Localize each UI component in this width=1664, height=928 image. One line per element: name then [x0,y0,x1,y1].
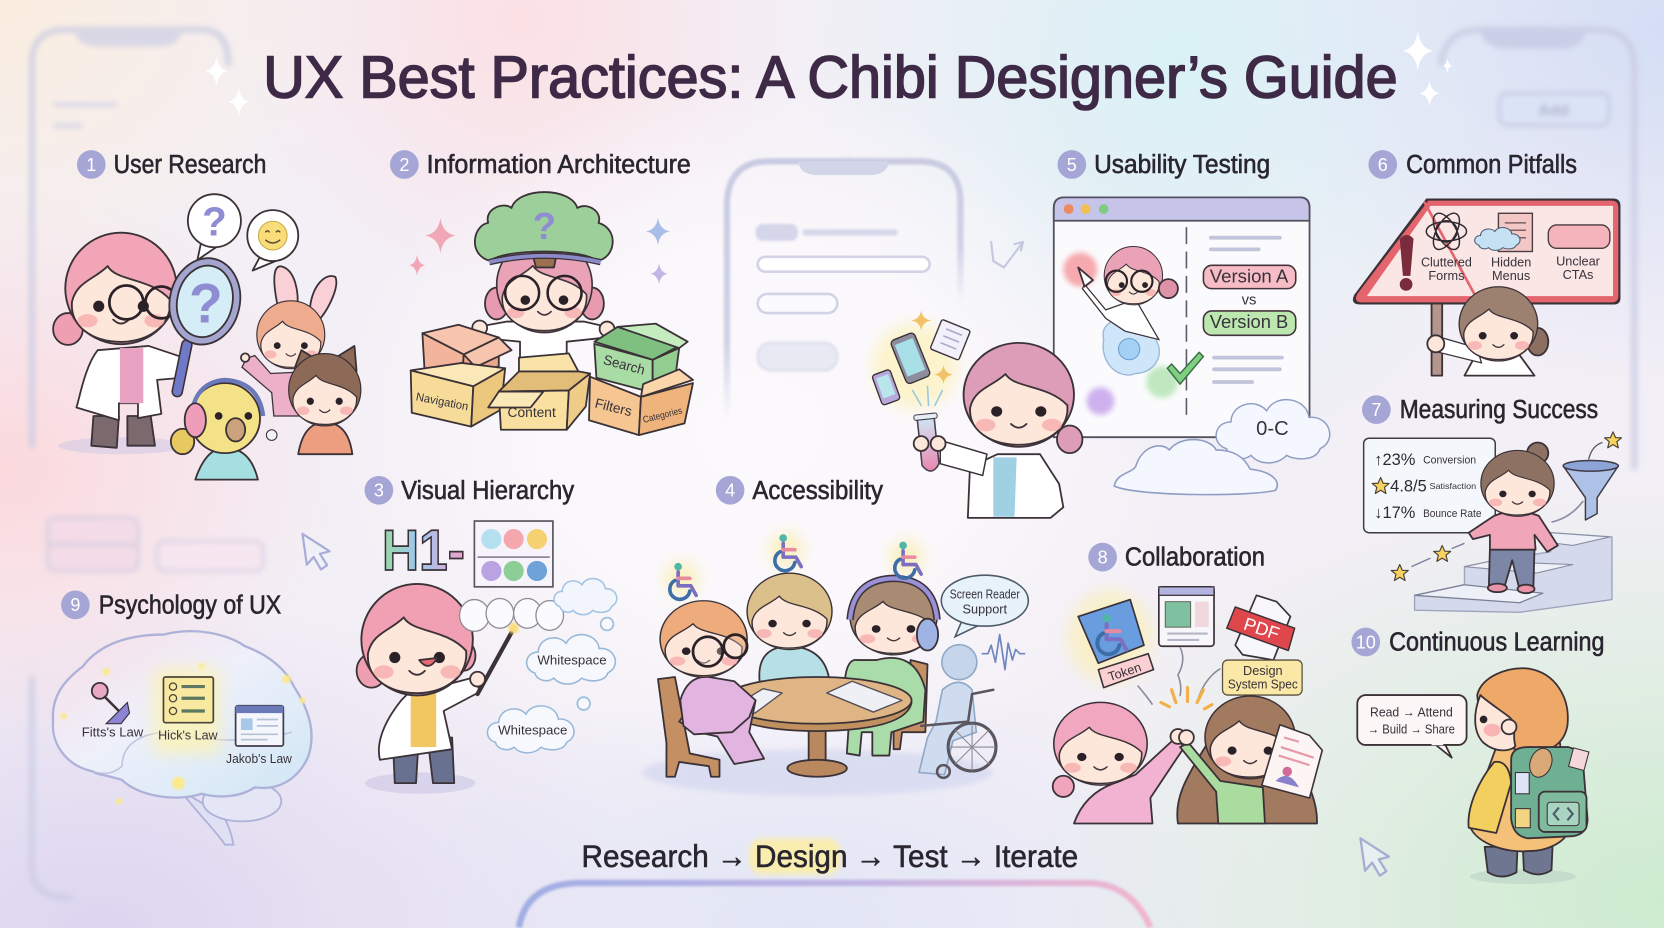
keyboards [732,681,902,713]
metrics card: 4.8/5 [1390,477,1427,495]
box: search: Search [602,352,647,378]
label: hidden menus: Menus [1492,268,1530,283]
small thought dots [577,618,613,710]
signpost [1432,297,1442,376]
heatmap glows [1063,253,1178,415]
icon: cluttered forms scribble [1426,209,1467,254]
shadow [365,773,475,794]
box: navigation [411,363,505,427]
colour palette card [474,521,553,587]
panel: 2 information architecture [390,150,693,435]
box: filters and categories: Categories [642,405,684,426]
panel: 4 accessibility [642,476,1028,796]
round table [723,677,912,777]
person: blue [747,573,832,683]
chairs [658,660,928,777]
panel: 9 psychology of UX [53,591,312,845]
pointer stick [470,623,519,694]
panel: 3 visual hierarchy [357,476,617,794]
scientist character with test tube [872,324,1082,518]
label: Hick's Law: Hick's Law [158,728,218,743]
glow behind Design [749,838,840,874]
heading: user research: 1 [86,155,96,175]
sketch bubbles [460,599,564,631]
clouds [1114,400,1330,495]
brain sparkles [61,663,306,804]
person: glasses, purple [660,601,764,764]
icon: Fitts's Law [92,683,130,724]
metrics card: ↑23% [1374,451,1416,469]
icon: wheelchair symbols [670,534,921,599]
blue splotch [1103,318,1159,375]
cursor: left [302,530,332,571]
heading: accessibility: 4 [725,481,735,501]
label: Jakob's Law: Jakob's Law [226,751,293,766]
small tester character [1078,247,1178,340]
clouds: 0-C [1256,418,1289,440]
PDF document: PDF [1241,614,1282,644]
head with glasses [497,237,592,333]
bunny child [241,266,336,416]
icon: wheelchair glows [664,533,923,595]
box: unlabeled orange [422,325,512,382]
resume document [1262,725,1322,798]
background: faded phone frame top left [32,30,228,446]
heading: user research: User Research [114,151,266,179]
wheelchair user silhouette [919,645,996,778]
heading: visual hierarchy: 3 [374,481,384,501]
teacher character [357,584,480,783]
cat-eared child [289,346,361,454]
heading: usability testing: Usability Testing [1094,151,1270,179]
heading: common pitfalls: 6 [1378,155,1388,175]
background: faded cards left [48,518,263,571]
version A pill: Version A [1210,266,1288,286]
panel: 7 measuring success [1362,395,1622,612]
panel: 1 user research [53,150,361,480]
idea tree [475,192,613,267]
label: hidden menus: Hidden [1491,254,1531,269]
background: faded phone frame top right: Add [1538,103,1569,120]
version B pill [1203,311,1296,335]
shadow [58,437,186,454]
heading: information architecture: Information Architecture [427,151,691,179]
mini browser card [1159,587,1214,646]
label: unclear CTAs: CTAs [1563,267,1593,282]
character holding sign [1427,287,1548,376]
design system spec note: System Spec [1228,677,1298,692]
box: search [594,324,688,393]
funnel [1551,443,1618,522]
body and pigtails [472,288,614,382]
box: navigation: Navigation [415,390,469,413]
metrics card [1364,438,1495,533]
icon: hidden menus [1475,213,1532,251]
cloud: whitespace lower: Whitespace [498,722,567,737]
sparkles left of title [205,56,249,117]
label: unclear CTAs: Unclear [1556,253,1601,268]
cloud: whitespace lower [487,706,574,753]
heading: continuous learning: 10 [1356,632,1376,652]
sparkles right of title [1402,31,1452,107]
check mark [1167,352,1203,384]
icon: Hick's Law menu [163,677,213,723]
design system spec note: Design [1243,663,1283,678]
researcher character [53,233,183,448]
connector squiggles [1138,647,1220,705]
magnifying glass [162,252,248,392]
box: filters and categories: Filters [593,396,634,419]
version B pill: Version B [1210,312,1288,332]
metrics card: Conversion [1423,455,1476,467]
character: brown hair [1177,696,1317,823]
token label [1098,654,1154,688]
metrics card: Satisfaction [1429,482,1476,491]
background: faded phone frame bottom left [32,679,70,898]
learner character [1468,668,1568,877]
token label: Token [1106,659,1143,684]
speech bubble: question [188,194,241,260]
idea tree: ? [533,205,556,248]
label: cluttered forms: Cluttered [1421,254,1472,269]
heading: information architecture: 2 [399,155,409,175]
cursor: bottom right [1360,835,1391,878]
speech bubble: learning path: → Build → Share [1368,721,1455,736]
metrics card: ↓17% [1374,504,1416,522]
icon: Jakob's Law browser [236,706,283,746]
speech bubble: learning path: Read → Attend [1370,704,1453,719]
token card glow [1068,590,1152,683]
heading: psychology of UX: 9 [70,595,80,615]
floor shadow [642,749,992,796]
heading: usability testing: 5 [1067,155,1077,175]
warning sign [1353,198,1620,305]
heading: measuring success: Measuring Success [1400,396,1598,424]
box: filters and categories [589,369,693,435]
H1 sample: H1- [382,519,465,583]
text lines [1211,238,1282,382]
character: pink hair [1053,702,1185,823]
icon: unclear CTA button [1548,225,1610,248]
brain illustration [53,631,312,845]
backpack [1511,745,1589,838]
label: cluttered forms: Forms [1428,268,1464,283]
panel: 8 collaboration [1053,543,1322,823]
blue cloud [554,579,617,615]
box: content: Content [508,405,556,420]
box: content [488,353,590,430]
panel: 10 continuous learning [1351,628,1605,884]
label: cluttered forms [1421,254,1472,283]
speech bubble: learning path [1357,695,1467,758]
character on stairs [1469,443,1558,593]
token card [1078,600,1144,663]
high-five sparks [1161,688,1212,709]
callout: screen reader support: Support [963,601,1008,616]
puppy child with headphones [171,380,277,480]
shadow [1470,869,1576,884]
PDF document [1227,595,1295,660]
heading: psychology of UX: Psychology of UX [99,591,281,619]
stars [1391,432,1622,580]
panel: 5 usability testing [872,150,1330,518]
heading: accessibility: Accessibility [752,477,883,505]
speech bubble: question: ? [202,199,227,245]
floating devices [872,310,971,406]
metrics card: Bounce Rate [1423,508,1481,520]
title: UX Best Practices: A Chibi Designer’s Guide [263,44,1398,111]
stairs [1415,533,1612,612]
vs label: vs [1242,293,1256,309]
process flow tagline: Research → Design → Test → Iterate [582,838,1078,874]
heading: collaboration: 8 [1098,547,1108,567]
magnifying glass: ? [189,273,223,335]
heading: measuring success: 7 [1371,400,1381,420]
sparkles [409,217,670,285]
label: hidden menus [1491,254,1531,283]
speech bubble: smiley [247,210,298,271]
heading: collaboration: Collaboration [1125,544,1265,572]
callout: screen reader support: Screen Reader [950,587,1020,602]
label: Fitts's Law: Fitts's Law [82,724,144,739]
bottom arc decoration [519,883,1150,927]
label: unclear CTAs [1556,253,1601,282]
heading: visual hierarchy: Visual Hierarchy [401,477,574,505]
person: headphones, green [845,578,938,756]
waveform [982,635,1025,670]
background: faded check stroke [991,242,1023,267]
callout: screen reader support [941,575,1028,637]
background: faded phone frame top right [1441,30,1634,467]
design system spec note [1223,660,1302,695]
panel: 6 common pitfalls [1353,150,1620,376]
heading: common pitfalls: Common Pitfalls [1406,151,1577,179]
cloud: whitespace upper [527,635,615,684]
browser window [1054,197,1310,437]
cloud: whitespace upper: Whitespace [537,652,607,667]
heading: continuous learning: Continuous Learning [1389,629,1605,657]
background: faded phone mockup centre [727,161,960,419]
yellow glow [154,669,220,753]
